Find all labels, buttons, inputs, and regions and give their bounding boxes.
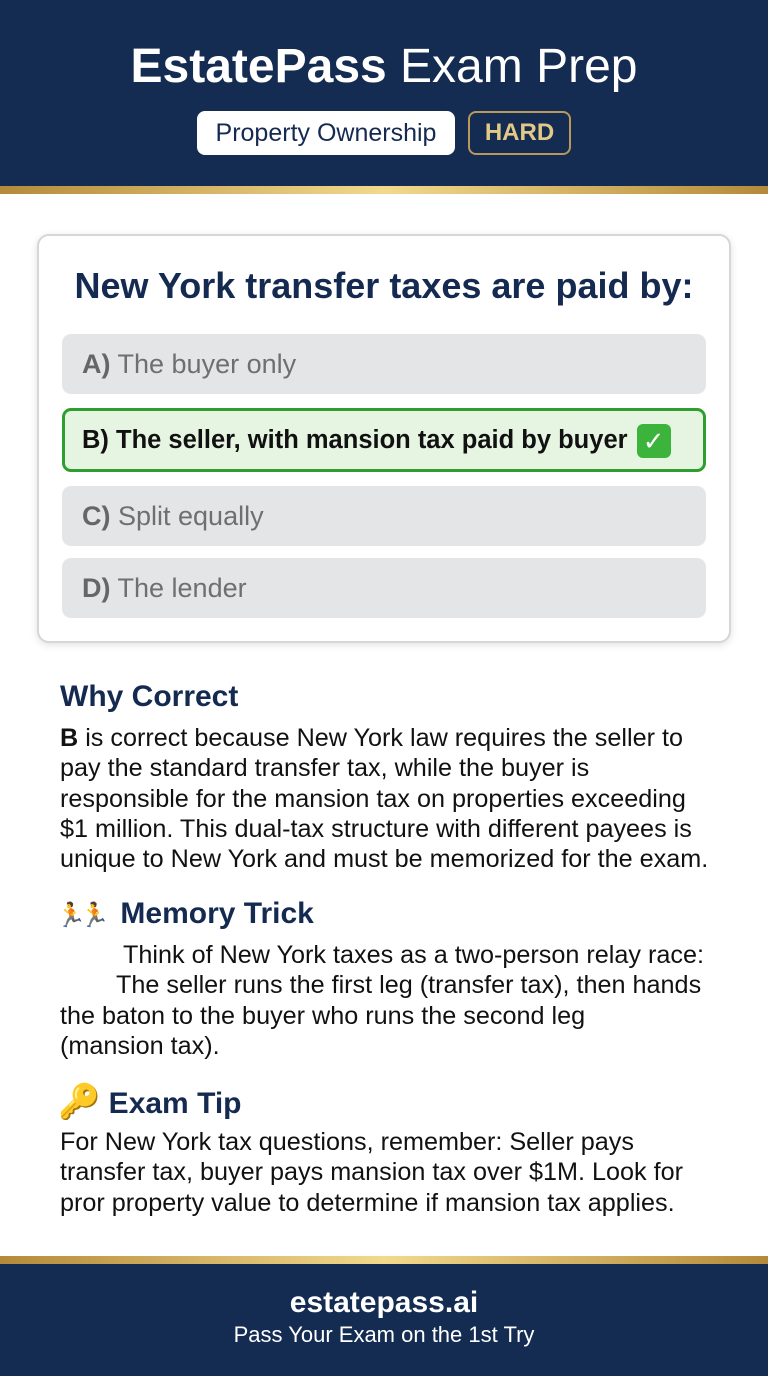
text: why correct: B is correct because New York law requires the seller to — [60, 724, 683, 752]
category pill: Property Ownership — [216, 119, 436, 147]
difficulty badge: HARD — [485, 119, 554, 146]
option B correct — [62, 408, 706, 472]
option D: D) The lender — [82, 573, 247, 603]
question: New York transfer taxes are paid by: — [75, 265, 693, 306]
text: memory trick — [60, 941, 704, 1060]
text: exam tip: transfer tax, buyer pays mansion tax over $1M. Look for — [60, 1158, 683, 1186]
option B correct: ✓ — [643, 426, 665, 456]
option B correct: B) The seller, with mansion tax paid by buyer — [82, 426, 628, 454]
heading: why correct: Why Correct — [60, 680, 238, 713]
text: why correct — [60, 724, 708, 873]
category pill — [197, 111, 455, 155]
text: exam tip — [60, 1128, 683, 1217]
text: exam tip: pror property value to determine if mansion tax applies. — [60, 1189, 675, 1217]
text: memory trick: (mansion tax). — [60, 1032, 220, 1060]
footer — [0, 1264, 768, 1376]
difficulty badge — [468, 111, 571, 155]
option C: C) Split equally — [82, 501, 264, 531]
text: memory trick: the baton to the buyer who runs the second leg — [60, 1002, 585, 1030]
option D — [62, 558, 706, 618]
text: why correct: responsible for the mansion tax on properties exceeding — [60, 785, 686, 813]
question card — [37, 234, 731, 643]
text: memory trick: Think of New York taxes as a two-person relay race: — [123, 941, 704, 969]
option C — [62, 486, 706, 546]
heading: exam tip: 🔑 Exam Tip — [58, 1083, 242, 1121]
text: why correct: $1 million. This dual-tax structure with different payees is — [60, 815, 692, 843]
text: exam tip: For New York tax questions, remember: Seller pays — [60, 1128, 634, 1156]
text: why correct: unique to New York and must be memorized for the exam. — [60, 845, 708, 873]
footer site: estatepass.ai — [290, 1286, 478, 1319]
text: why correct: pay the standard transfer tax, while the buyer is — [60, 754, 589, 782]
option A: A) The buyer only — [82, 349, 296, 379]
text: memory trick: The seller runs the first leg (transfer tax), then hands — [116, 971, 701, 999]
header — [0, 0, 768, 188]
option A — [62, 334, 706, 394]
footer tagline: Pass Your Exam on the 1st Try — [234, 1322, 534, 1347]
heading: memory trick: 🏃🏃 Memory Trick — [56, 897, 314, 930]
title: EstatePass Exam Prep — [131, 40, 637, 93]
